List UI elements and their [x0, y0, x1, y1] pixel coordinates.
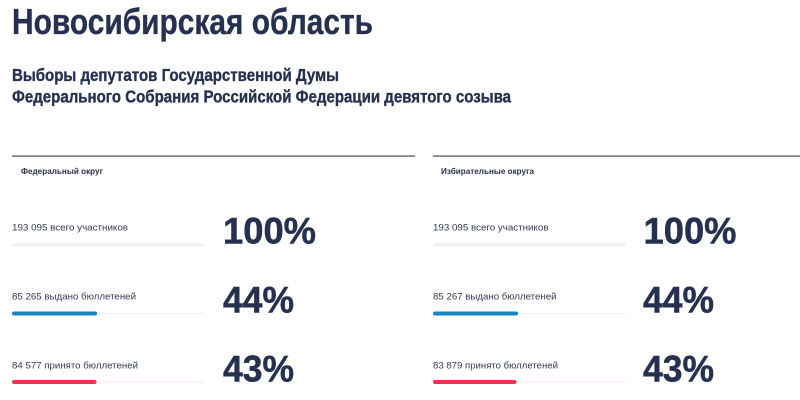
row: ballots issued: 44%	[223, 278, 294, 320]
row: total participants: 193 095 всего участников	[433, 222, 548, 234]
row: ballots accepted	[12, 348, 294, 390]
row: ballots accepted: 43%	[643, 348, 714, 390]
panel: electoral districts	[433, 156, 800, 390]
row: ballots issued	[12, 278, 294, 320]
row: total participants: 100%	[223, 210, 316, 252]
row: total participants: 100%	[644, 210, 736, 252]
title: Новосибирская область	[12, 1, 373, 42]
panel: federal district	[12, 156, 415, 390]
subtitle	[12, 65, 511, 106]
row: total participants	[12, 210, 316, 252]
row: total participants	[433, 210, 736, 252]
row: ballots accepted: 84 577 принято бюллетеней	[12, 360, 138, 372]
subtitle: Выборы депутатов Государственной Думы	[12, 65, 339, 85]
heading: federal district: Федеральный округ	[21, 166, 103, 176]
row: ballots issued: 85 265 выдано бюллетеней	[12, 292, 136, 302]
row: ballots issued	[433, 278, 714, 320]
heading: electoral districts: Избирательные округа	[441, 166, 534, 176]
row: ballots accepted	[433, 348, 714, 390]
row: ballots accepted: 43%	[223, 348, 294, 390]
subtitle: Федерального Собрания Российской Федерации девятого созыва	[12, 86, 511, 106]
row: ballots accepted: 83 879 принято бюллетеней	[433, 360, 558, 372]
row: total participants: 193 095 всего участников	[12, 222, 128, 234]
row: ballots issued: 44%	[643, 278, 714, 320]
row: ballots issued: 85 267 выдано бюллетеней	[433, 292, 556, 302]
